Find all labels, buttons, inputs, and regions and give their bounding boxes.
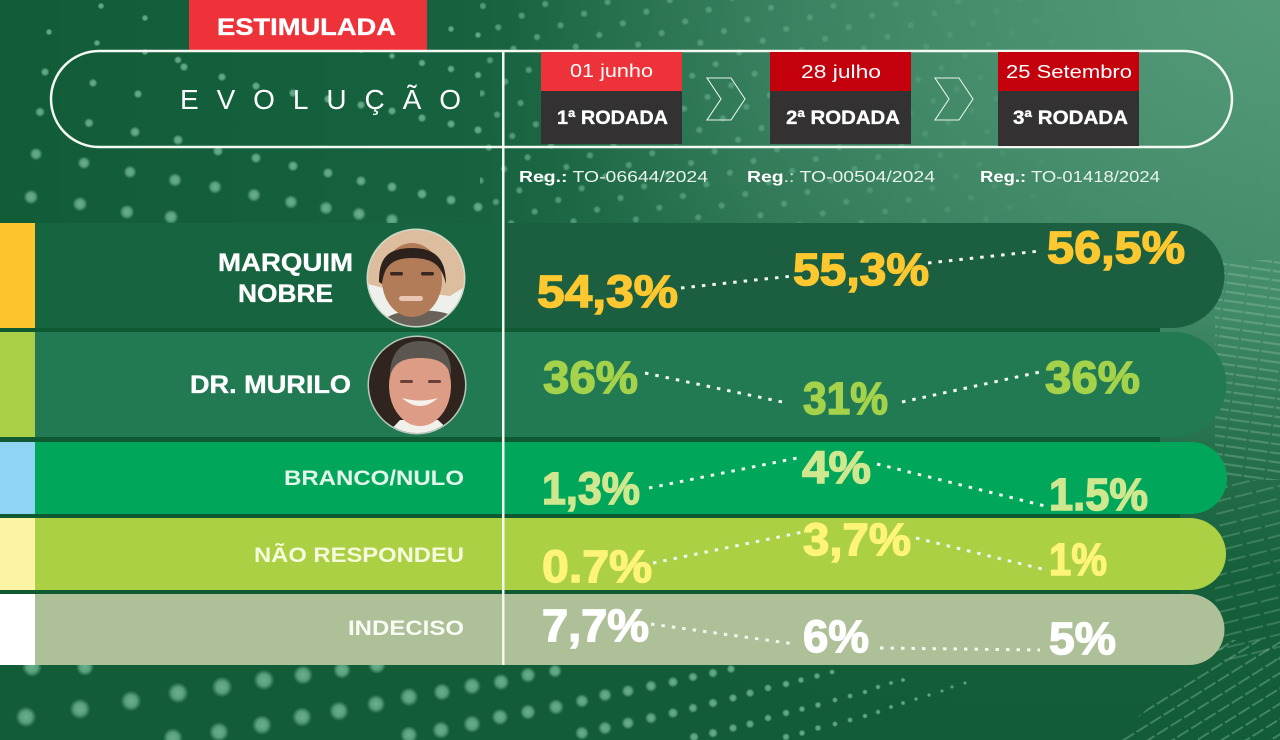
vertical axis line (502, 51, 504, 665)
label: Branco/Nulo: BRANCO/NULO (284, 467, 464, 490)
label: Não Respondeu: NÃO RESPONDEU (254, 544, 464, 567)
registration numbers: Reg .: TO-00504/2024 (747, 169, 935, 186)
values: Dr. Murilo (543, 352, 1140, 424)
registration numbers: Reg.: TO-01418/2024 (980, 169, 1160, 186)
label: Indeciso: INDECISO (348, 617, 464, 640)
values: Branco/Nulo (542, 442, 1148, 520)
values: Dr. Murilo: 31% (803, 373, 888, 424)
round 1 box: 01 junho (570, 61, 653, 81)
round 2 box: 28 julho (801, 62, 881, 82)
values: Branco/Nulo: 4% (802, 442, 871, 493)
values: Não Respondeu (542, 514, 1107, 592)
registration numbers (519, 169, 1160, 186)
arrow: round 1 to 2 (707, 78, 745, 120)
round 2 box (770, 52, 911, 144)
values: Indeciso: 6% (803, 611, 869, 662)
arrow: round 2 to 3 (935, 78, 973, 120)
registration numbers: Reg.: TO-06644/2024 (519, 169, 708, 186)
round 3 box: 25 Setembro (1006, 62, 1132, 82)
values: Não Respondeu: 1% (1049, 534, 1107, 585)
values: Marquim Nobre: 56,5% (1047, 222, 1185, 273)
values: Dr. Murilo: 36% (543, 352, 638, 403)
values: Branco/Nulo: 1,3% (542, 463, 640, 514)
values: Marquim Nobre (537, 222, 1185, 317)
row: Dr. Murilo (0, 332, 1227, 437)
photo: Marquim Nobre (366, 228, 466, 330)
row gaps (0, 328, 1180, 594)
label: Dr. Murilo: DR. MURILO (190, 371, 351, 399)
row: Não Respondeu (0, 518, 1226, 590)
row: Indeciso (0, 594, 1224, 665)
round 3 box: 3ª RODADA (1013, 108, 1128, 129)
label: Marquim Nobre: MARQUIM (218, 249, 353, 277)
label: Marquim Nobre: NOBRE (238, 280, 333, 308)
values: Dr. Murilo: 36% (1045, 352, 1140, 403)
tab: Estimulada (189, 0, 427, 50)
row: Branco/Nulo (0, 442, 1227, 514)
values: Indeciso: 7,7% (542, 600, 649, 651)
row: Marquim Nobre (0, 223, 1224, 328)
values: Marquim Nobre: 55,3% (793, 244, 929, 295)
values: Não Respondeu: 3,7% (803, 514, 911, 565)
tab: Estimulada: ESTIMULADA (217, 14, 396, 41)
heading: Evolução: EVOLUÇÃO (180, 84, 461, 115)
values: Indeciso: 5% (1049, 613, 1116, 664)
values: Marquim Nobre: 54,3% (537, 266, 678, 317)
round 3 box (998, 52, 1139, 146)
values: Indeciso (542, 600, 1116, 664)
round 2 box: 2ª RODADA (786, 108, 900, 129)
label: Marquim Nobre (218, 249, 353, 308)
round 1 box: 1ª RODADA (557, 108, 668, 129)
values: Não Respondeu: 0.7% (542, 541, 652, 592)
round 1 box (541, 52, 682, 144)
header pill outline (51, 51, 1232, 147)
photo: Dr. Murilo (367, 335, 467, 436)
values: Branco/Nulo: 1.5% (1049, 469, 1148, 520)
